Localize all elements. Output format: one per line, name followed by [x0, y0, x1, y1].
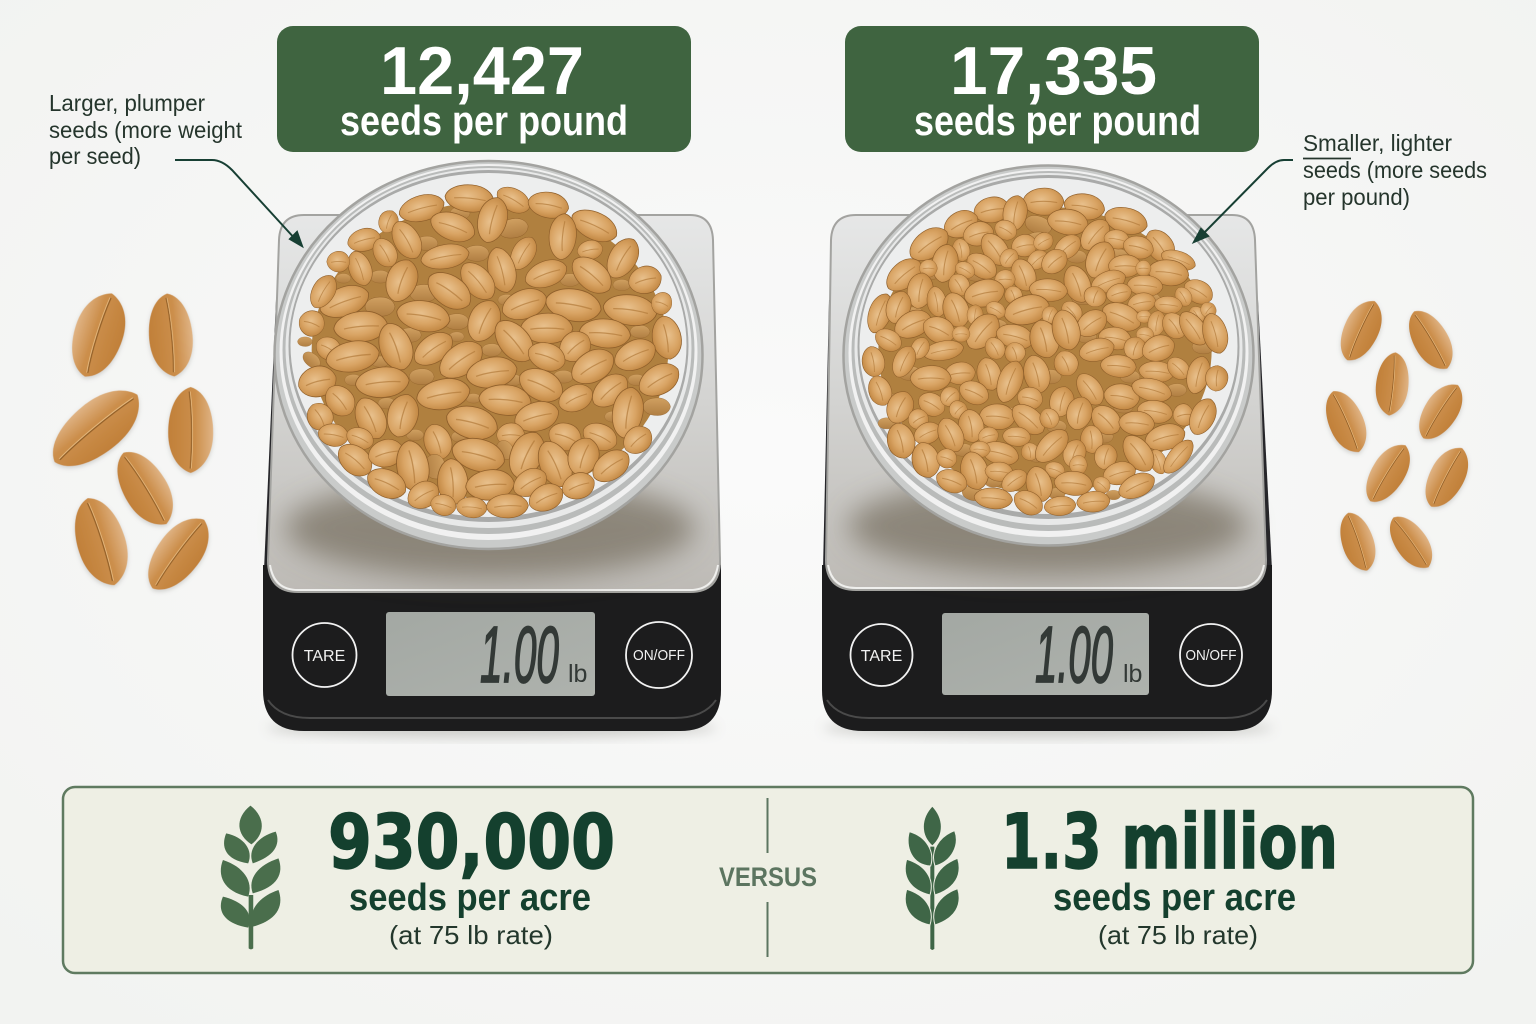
stat label: seeds per acre [1053, 877, 1296, 919]
digital display [942, 610, 1149, 699]
right callout text [1303, 130, 1487, 210]
tare button: TARE [861, 648, 902, 665]
left heading badge: 12,427 seeds per pound [277, 26, 691, 152]
scale side edges [264, 300, 721, 570]
scale side edges [823, 300, 1272, 570]
stat: 1.3 million: 1.3 million [1001, 797, 1338, 886]
scale plate [268, 215, 720, 592]
wheat icon: right [905, 806, 959, 950]
digital display: 1.00 [480, 610, 559, 699]
right heading badge: 17,335 seeds per pound [845, 26, 1259, 152]
tare button [292, 623, 356, 687]
scale base [822, 565, 1272, 731]
left callout arrow [175, 160, 302, 246]
digital display: lb [568, 660, 587, 688]
digital display: 1.00 [1035, 610, 1113, 699]
on/off button [626, 622, 692, 688]
scale plate [826, 215, 1266, 590]
stat: 930,000: 930,000 [328, 798, 615, 886]
heading unit: seeds per pound [914, 97, 1201, 144]
right glass bowl of small seeds [844, 166, 1254, 546]
digital display: lb [1123, 660, 1142, 688]
heading number: 12,427 [380, 33, 584, 109]
left glass bowl of large seeds [274, 161, 702, 549]
right callout text: seeds (more seeds [1303, 157, 1487, 183]
bottom comparison panel [63, 787, 1473, 973]
seed mass [295, 181, 685, 519]
right callout arrow [1194, 160, 1293, 242]
right callout text: per pound) [1303, 184, 1410, 210]
right kitchen scale [822, 215, 1273, 738]
tare button: TARE [304, 648, 345, 665]
left callout text: per seed) [49, 143, 141, 169]
stat note: (at 75 lb rate) [1098, 920, 1258, 950]
scale base [263, 565, 721, 731]
right callout text: Smaller, lighter [1303, 130, 1452, 156]
left callout text: seeds (more weight [49, 117, 243, 143]
on/off button [1180, 624, 1242, 686]
heading number: 17,335 [950, 33, 1157, 109]
on/off button: ON/OFF [1186, 647, 1236, 664]
left kitchen scale [263, 215, 721, 738]
versus divider: VERSUS [719, 862, 817, 892]
heading unit: seeds per pound [340, 97, 628, 144]
icon group: loose small seeds [1317, 294, 1477, 576]
left callout text: Larger, plumper [49, 90, 205, 116]
on/off button: ON/OFF [633, 647, 685, 664]
stat label: seeds per acre [349, 877, 591, 919]
left callout text [49, 90, 243, 169]
tare button [850, 624, 912, 686]
digital display [386, 610, 595, 699]
seed mass [860, 188, 1232, 520]
wheat icon: left [221, 806, 280, 949]
stat note: (at 75 lb rate) [389, 920, 553, 950]
icon group: loose large seeds [39, 286, 222, 601]
